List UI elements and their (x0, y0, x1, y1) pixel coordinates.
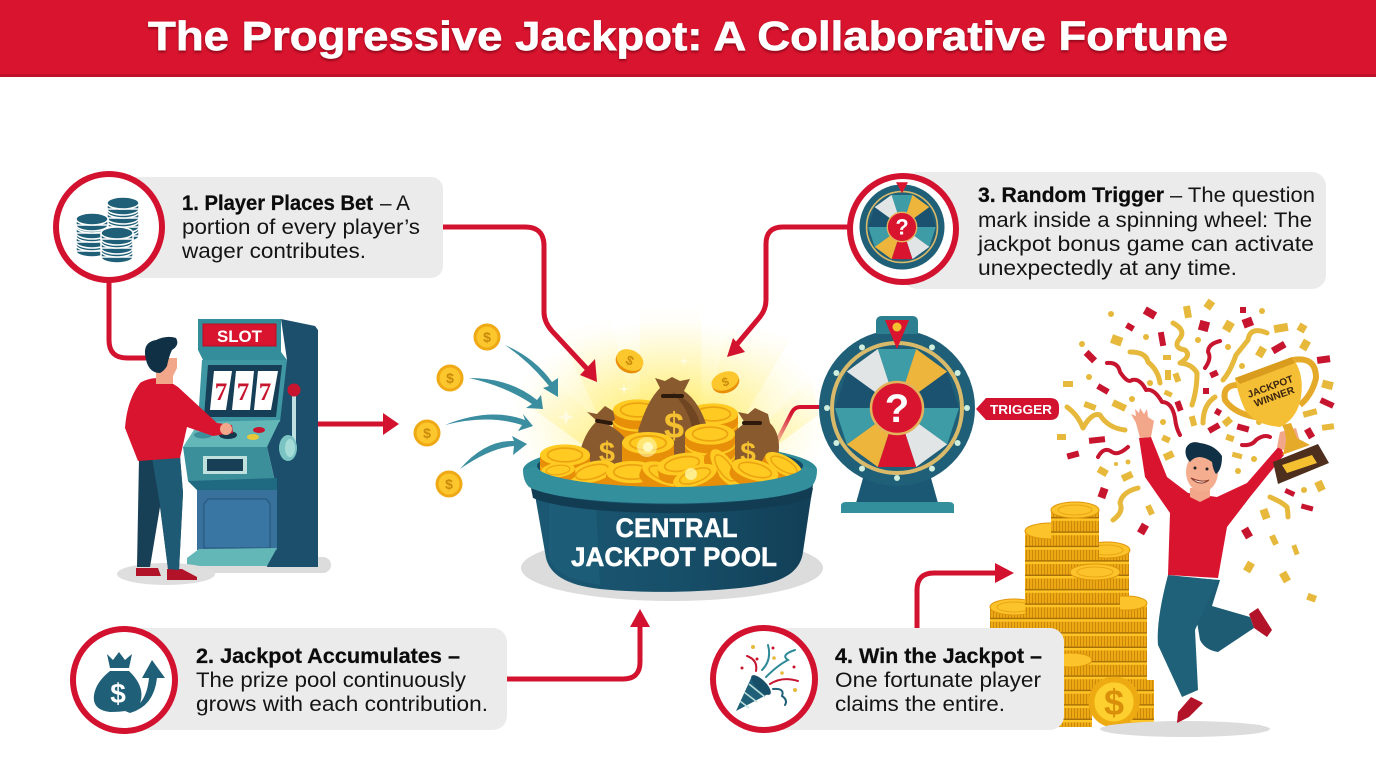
step 4 text: One fortunate player (835, 669, 1041, 692)
step 2 text: grows with each contribution. (196, 693, 488, 716)
step 4 text: claims the entire. (835, 693, 1005, 716)
front coin: $ (1104, 682, 1124, 723)
stack front (1070, 564, 1120, 702)
icon: small wheel (859, 182, 945, 270)
step 2 text: The prize pool continuously (196, 669, 467, 692)
right leg (1180, 577, 1254, 652)
step 1 text (181, 192, 420, 263)
shoes (1177, 697, 1203, 723)
head (156, 358, 177, 384)
pool label: CENTRAL (616, 513, 738, 543)
step 3 text: mark inside a spinning wheel: The (978, 209, 1312, 232)
slot machine shadow (190, 557, 331, 573)
cup (1235, 357, 1302, 427)
coin (414, 420, 440, 446)
connector: wheel to pool (775, 407, 822, 445)
hair (1186, 442, 1222, 474)
trophy label: JACKPOT (1246, 374, 1295, 401)
money bag: large: $ (664, 405, 684, 446)
coin (436, 364, 464, 392)
money bag: large (638, 377, 708, 455)
icon: money bag with growth arrow: $ (110, 678, 126, 709)
step 1 text: portion of every player’s (182, 216, 420, 239)
step 4 badge (713, 628, 815, 730)
step 2 badge (73, 629, 175, 731)
step 4 text: 4. Win the Jackpot – (835, 645, 1042, 668)
plate (1282, 455, 1317, 473)
stack left (1025, 523, 1075, 631)
slot sign: SLOT (217, 327, 263, 346)
screen: 7 (215, 379, 227, 406)
coin: $ (446, 370, 454, 386)
stack right (1103, 596, 1147, 683)
coin bed (542, 456, 798, 488)
rim back (523, 443, 817, 497)
step 1 text: – A (380, 192, 410, 215)
coin pile (540, 423, 807, 501)
sparkles (558, 355, 779, 480)
trophy label: WINNER (1253, 385, 1297, 410)
left leg (1158, 575, 1218, 697)
step 1 badge (56, 174, 162, 280)
stack tallest (1051, 502, 1099, 675)
handles (1225, 359, 1316, 418)
shirt (125, 378, 233, 461)
slot sign (203, 324, 276, 346)
falling coin: $ (720, 374, 731, 390)
falling coin (709, 368, 742, 397)
machine middle (183, 447, 277, 490)
button console (183, 420, 280, 447)
panel: step 4 (713, 628, 1064, 730)
eyes (1194, 466, 1208, 470)
money bag: left: $ (599, 437, 615, 469)
falling coin: $ (623, 352, 637, 369)
wheel segments (824, 343, 970, 481)
teal motion arrows (445, 345, 558, 469)
red ribbons (1098, 341, 1270, 457)
front coin (1088, 676, 1140, 728)
coin: $ (423, 425, 431, 441)
sparks (751, 645, 797, 692)
pool label: JACKPOT POOL (571, 542, 777, 572)
neck (1190, 488, 1210, 502)
step 3 text: 3. Random Trigger (978, 184, 1164, 207)
machine side cabinet (267, 319, 318, 567)
screen: 7 (259, 379, 271, 406)
step 2 text (196, 645, 488, 716)
step 3 text: jackpot bonus game can activate (977, 233, 1314, 256)
machine foot (187, 548, 277, 566)
stack base left (1050, 653, 1092, 727)
connector: machine to coins (318, 413, 399, 435)
trophy (1225, 357, 1329, 484)
jeans (137, 456, 183, 570)
step 1 card (110, 177, 443, 278)
hair (145, 337, 177, 373)
stem (1282, 423, 1310, 455)
under-rim shading (531, 488, 813, 513)
icon: coin stacks (76, 197, 139, 263)
glow behind the pool (510, 305, 830, 520)
gold flakes (1057, 299, 1334, 603)
money bag: left (581, 406, 633, 478)
arrow (469, 378, 543, 409)
slot machine (183, 319, 318, 567)
panel: step 2 (73, 628, 507, 731)
step 2 card (125, 628, 507, 730)
money bag: right (727, 408, 779, 478)
shoes (136, 568, 161, 576)
face (1186, 452, 1218, 492)
rear coins (613, 399, 738, 453)
screen: 7 (237, 379, 249, 406)
smile (1191, 478, 1209, 483)
connector: step 1 to pool (443, 227, 597, 382)
pool shadow (521, 535, 823, 601)
wheel stand (841, 478, 954, 513)
connector: step 2 to pool (505, 609, 650, 679)
coin (474, 324, 500, 350)
gold coin stacks (990, 502, 1154, 728)
stack right rear (1084, 542, 1130, 610)
trigger tag: TRIGGER (990, 402, 1053, 417)
gold ribbons (1067, 323, 1288, 520)
lever (279, 384, 300, 461)
incoming coins (414, 324, 500, 498)
pool body (532, 478, 814, 592)
machine head (198, 319, 287, 360)
streamers (747, 645, 798, 705)
step 3 text: – The question (1170, 184, 1315, 207)
connector: step 3 to pool (727, 227, 850, 357)
shadow (117, 563, 215, 585)
panel: step 3 (850, 172, 1326, 289)
trigger tag (976, 398, 1059, 420)
arrow (445, 414, 533, 431)
icon: party popper (736, 645, 798, 711)
money bag: right: $ (740, 437, 756, 468)
shirt (1139, 437, 1284, 578)
step 2 text: 2. Jackpot Accumulates – (196, 645, 460, 668)
step 4 text (835, 645, 1042, 716)
pool label (571, 513, 777, 572)
step 1 text: 1. Player Places Bet (182, 192, 373, 215)
coin: $ (483, 329, 491, 345)
highlight panel (549, 500, 600, 585)
raised hand (1131, 408, 1154, 438)
stack base right (1115, 680, 1154, 723)
screen (198, 360, 287, 422)
arrow (460, 436, 527, 469)
step 3 badge (850, 176, 956, 282)
title: The Progressive Jackpot: A Collaborative Fortune (148, 13, 1228, 59)
question mark: ? (885, 387, 909, 431)
celebrating winner (1100, 408, 1300, 737)
falling coin (612, 345, 647, 378)
confetti (1057, 299, 1335, 603)
coin: $ (445, 476, 453, 492)
wheel pointer (876, 316, 918, 349)
machine lower door (197, 490, 277, 550)
step 3 text: unexpectedly at any time. (978, 257, 1237, 280)
hand (220, 423, 232, 435)
stack far left (990, 599, 1040, 637)
coin (436, 470, 462, 498)
base (1273, 444, 1329, 484)
central jackpot pool (521, 355, 823, 601)
trophy-holding hand (1277, 428, 1300, 450)
icon: money bag with growth arrow (94, 652, 165, 713)
title banner (0, 0, 1376, 77)
ground shadow (1100, 721, 1270, 737)
panel: step 1 (56, 174, 443, 280)
connector: step 1 to machine (109, 282, 146, 358)
rim front (523, 466, 817, 504)
step 1 text: wager contributes. (181, 240, 366, 263)
player at machine (117, 337, 233, 585)
prize wheel (819, 316, 975, 513)
popper cone (736, 676, 770, 711)
step 3 text (977, 184, 1315, 280)
red flakes (1066, 307, 1335, 539)
step 4 card (765, 628, 1064, 730)
step 3 card (903, 172, 1326, 289)
wheel rim (819, 330, 975, 486)
arrow (505, 345, 558, 397)
icon: small wheel: ? (895, 215, 909, 240)
connector: step 4 to coin stacks (917, 563, 1014, 630)
